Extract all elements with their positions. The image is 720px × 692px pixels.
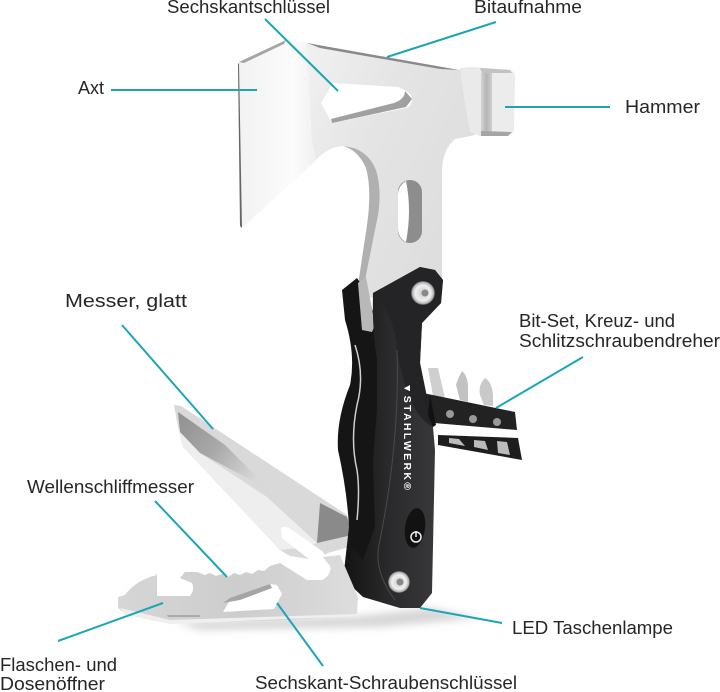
callout: Bit-Set — [496, 310, 720, 408]
cross bit 2 — [480, 378, 493, 406]
callout: Messer, glatt — [65, 290, 213, 429]
callout: LED Taschenlampe: LED Taschenlampe — [512, 617, 673, 638]
callout: Flaschen- und Dosenöffner — [0, 603, 163, 692]
callout: Bitaufnahme — [387, 0, 582, 57]
callout: Sechskantschlüssel — [167, 0, 338, 91]
folding knife blade — [174, 405, 356, 560]
callout: Hammer: Hammer — [625, 96, 700, 117]
bit holder — [423, 368, 522, 460]
callout: Bit-Set: Schlitzschraubendreher — [519, 330, 720, 351]
bit socket slot — [321, 83, 412, 123]
icon: multitool — [118, 40, 522, 624]
flat bit — [428, 368, 445, 398]
oval slot — [398, 180, 422, 243]
callout: Flaschen- und Dosenöffner: Flaschen- und — [0, 654, 117, 675]
axe head and shank — [238, 40, 515, 300]
serrated tool — [118, 555, 358, 624]
callout: Wellenschliffmesser — [27, 476, 227, 577]
shadow under the tool — [175, 608, 480, 630]
callout: Wellenschliffmesser: Wellenschliffmesser — [27, 476, 194, 497]
brand name: ▼STAHLWERK® — [401, 383, 413, 490]
hammer head — [460, 67, 515, 136]
cross bit 1 — [456, 371, 468, 402]
callout: Axt: Axt — [78, 77, 104, 98]
bottom screw — [388, 571, 410, 593]
callout: Bit-Set: Bit-Set, Kreuz- und — [519, 310, 675, 331]
callout: LED Taschenlampe — [420, 608, 673, 638]
icon: power button — [402, 507, 428, 549]
callout: Sechskant-Schraubenschlüssel — [255, 603, 517, 692]
callout: Messer, glatt: Messer, glatt — [65, 290, 187, 311]
black handle back side — [338, 277, 380, 600]
black handle — [345, 267, 443, 608]
top screw — [411, 281, 435, 305]
